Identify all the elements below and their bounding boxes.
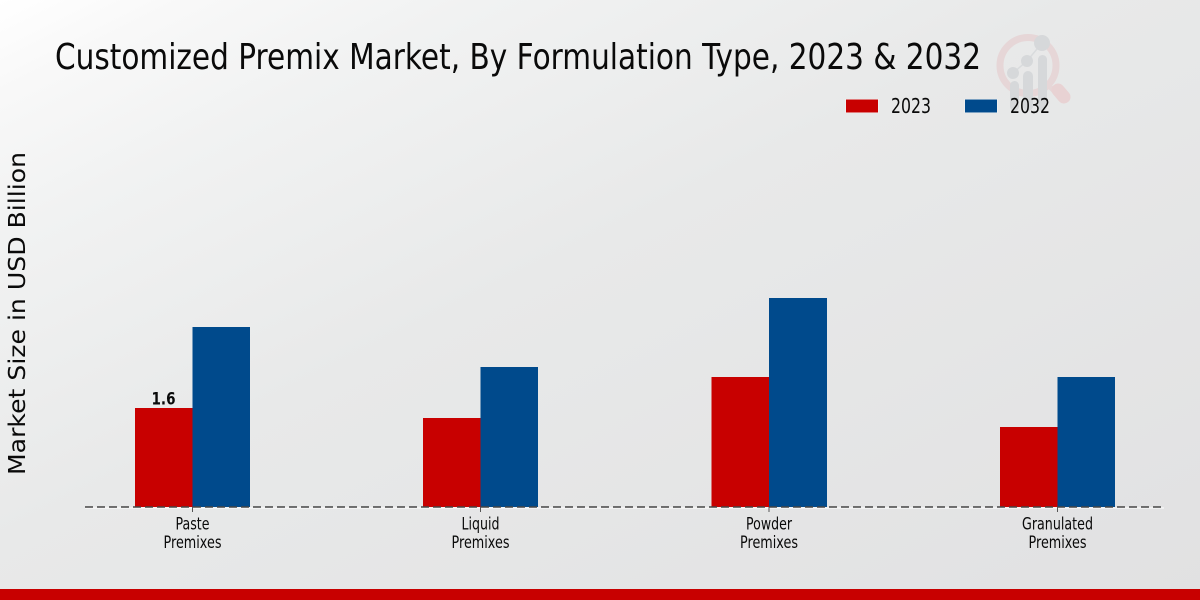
bar chart — [85, 298, 1164, 512]
x axis label: Liquid Premixes — [452, 514, 510, 552]
group: Liquid Premixes — [423, 367, 538, 507]
group: Granulated Premixes — [1000, 377, 1115, 507]
x axis label: Powder Premixes: Powder — [746, 514, 792, 534]
legend: 2023 — [846, 94, 931, 118]
value label: 1.6 — [152, 390, 176, 408]
x axis label: Paste Premixes: Premixes — [164, 533, 222, 552]
icon: watermark logo magnifier with bars — [1000, 35, 1064, 111]
x axis label: Granulated Premixes: Premixes — [1028, 533, 1086, 552]
x axis label: Paste Premixes: Paste — [176, 514, 210, 534]
x axis label: Liquid Premixes: Premixes — [452, 533, 510, 552]
footer bar — [0, 589, 1200, 600]
x axis label: Powder Premixes — [740, 514, 798, 552]
y axis label: Market Size in USD Billion — [3, 152, 31, 475]
legend: 2032: 2032 — [1010, 94, 1050, 118]
legend: 2032 — [964, 94, 1050, 118]
x axis label: Liquid Premixes: Liquid — [462, 514, 500, 534]
x axis label: Paste Premixes — [164, 514, 222, 552]
legend — [846, 94, 1050, 118]
group: Powder Premixes — [712, 298, 827, 507]
title: Customized Premix Market, By Formulation Type, 2023 & 2032 — [55, 37, 981, 78]
x axis label: Granulated Premixes — [1022, 514, 1093, 552]
legend: 2023: 2023 — [891, 94, 931, 118]
x axis label: Powder Premixes: Premixes — [740, 533, 798, 552]
x axis label: Granulated Premixes: Granulated — [1022, 514, 1093, 534]
group: Paste Premixes — [135, 327, 250, 507]
